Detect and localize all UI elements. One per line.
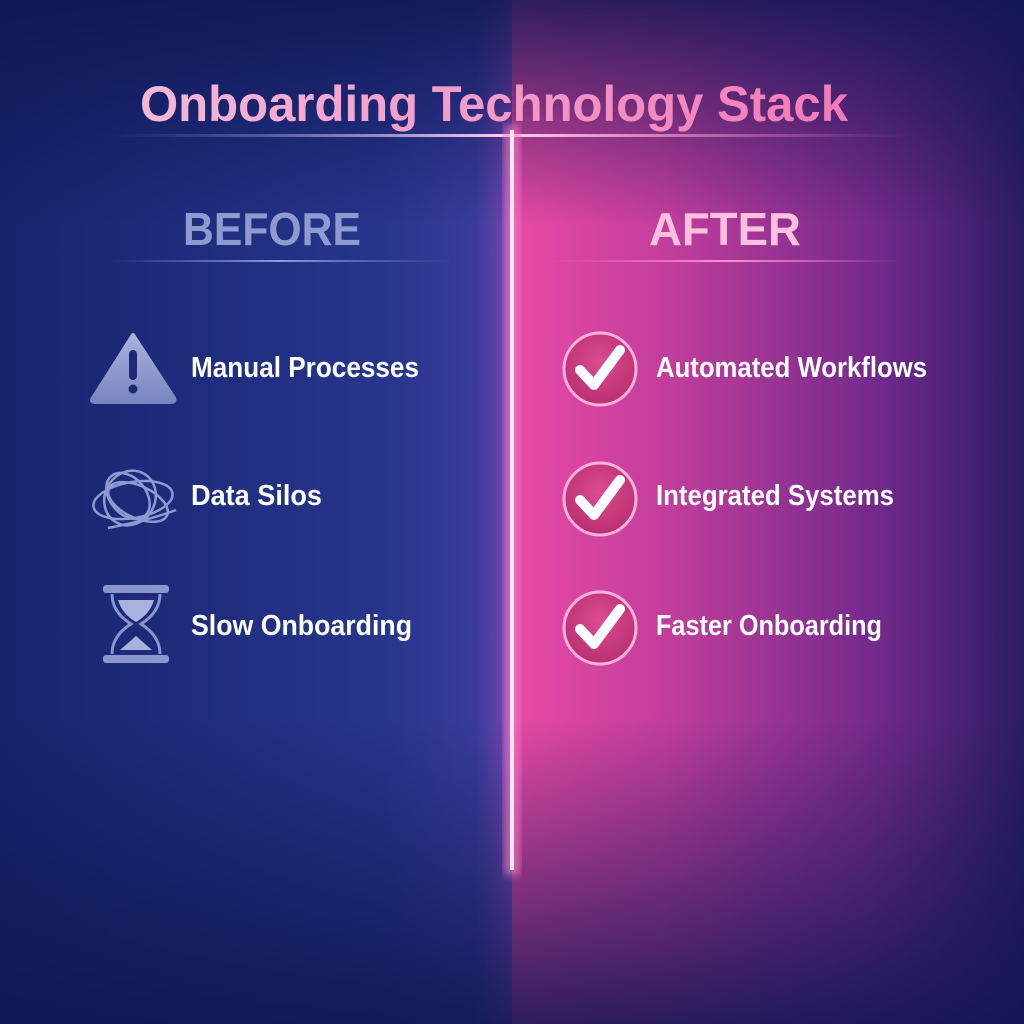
text: automated workflows: Automated Workflows [656, 352, 927, 384]
icon: check 2 [564, 463, 636, 535]
title: Onboarding Technology Stack [140, 76, 848, 132]
heading: before: BEFORE [183, 203, 361, 255]
text: manual processes: Manual Processes [191, 352, 419, 384]
divider glowing line [504, 125, 520, 875]
icon: check 1 [564, 333, 636, 405]
icon: tangled data silos [90, 461, 176, 535]
icon: hourglass [103, 585, 169, 663]
icon: warning [92, 335, 174, 402]
text: slow onboarding: Slow Onboarding [191, 610, 412, 642]
text: integrated systems: Integrated Systems [656, 480, 894, 512]
text: faster onboarding: Faster Onboarding [656, 610, 882, 642]
text: data silos: Data Silos [191, 480, 322, 512]
icon: check 3 [564, 592, 636, 664]
heading: after: AFTER [649, 203, 801, 255]
